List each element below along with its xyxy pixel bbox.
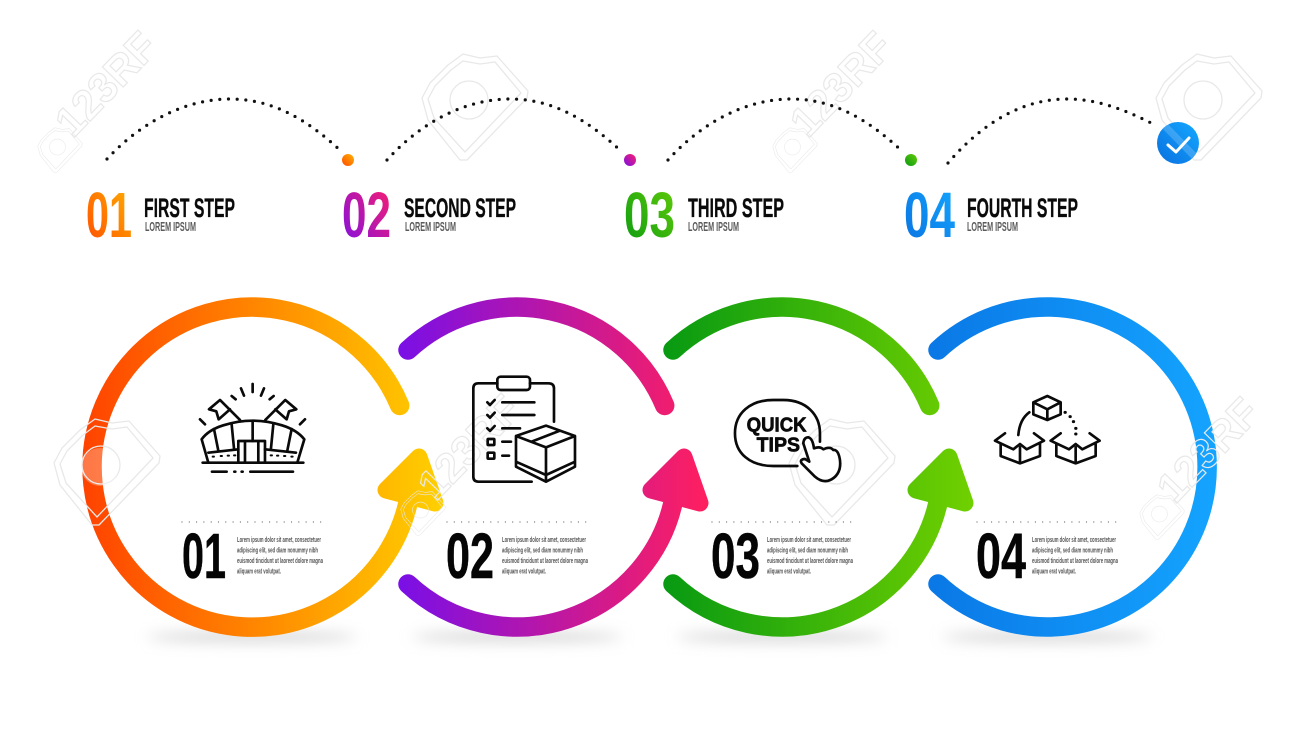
step heading 3 <box>624 179 784 251</box>
step heading 4: LOREM IPSUM <box>967 220 1018 234</box>
text block 1: adipiscing elit, sed diam nonummy nibh <box>237 548 318 554</box>
text block 4: adipiscing elit, sed diam nonummy nibh <box>1032 548 1113 554</box>
icon: quick tips bubble: QUICK <box>747 415 807 437</box>
watermark: top right <box>1156 54 1262 160</box>
panel: ring 4 blue <box>938 307 1207 627</box>
watermark: arrow 1 area: 123RF <box>409 386 529 508</box>
text block 3: aliquam erat volutpat. <box>767 568 811 576</box>
dotted connector 2 <box>387 99 622 160</box>
arrowhead 1 <box>386 457 435 503</box>
step heading 4: FOURTH STEP <box>967 193 1078 223</box>
step heading 4 <box>904 179 1078 251</box>
step heading 3: THIRD STEP <box>688 193 784 223</box>
node dot green <box>905 154 917 166</box>
text block 2: Lorem ipsum dolor sit amet, consectetuer <box>502 537 586 544</box>
text block 4: aliquam erat volutpat. <box>1032 568 1076 576</box>
text block 4: euismod tincidunt ut laoreet dolore magna <box>1032 558 1118 565</box>
step heading 1: FIRST STEP <box>144 193 235 223</box>
panel: ring 1 orange <box>92 307 435 627</box>
icon: checklist with parcel <box>473 377 575 482</box>
watermark: top second <box>422 54 528 160</box>
watermark: quick tips area <box>789 419 895 525</box>
text block 1: Lorem ipsum dolor sit amet, consectetuer <box>237 537 321 544</box>
step heading 2: 02 <box>342 179 391 251</box>
text block 3: 03 <box>711 520 760 592</box>
icon: boxes distribution <box>995 396 1100 463</box>
step heading 2: LOREM IPSUM <box>405 220 456 234</box>
icon: check badge <box>1157 122 1199 164</box>
ground shadows <box>147 633 1152 641</box>
text block 3 <box>711 520 853 592</box>
text block 1: euismod tincidunt ut laoreet dolore magna <box>237 558 323 565</box>
step heading 1 <box>86 179 235 251</box>
node dot orange <box>342 154 354 166</box>
watermark: top third: 123RF <box>781 23 901 145</box>
panel: ring 3 green <box>673 307 965 627</box>
arrowhead 3 <box>916 457 965 503</box>
step heading 2 <box>342 179 516 251</box>
watermark: top left: 123RF <box>46 23 166 145</box>
icon: quick tips bubble: TIPS <box>757 435 800 457</box>
text block 2: 02 <box>446 520 494 592</box>
text block 4: Lorem ipsum dolor sit amet, consectetuer <box>1032 537 1116 544</box>
dotted connector 3 <box>668 99 903 160</box>
step heading 1: LOREM IPSUM <box>145 220 196 234</box>
icon: stadium <box>200 384 305 472</box>
panel: ring 2 purple pink <box>408 307 700 627</box>
text block 1 <box>182 520 323 592</box>
text block 4 <box>976 520 1118 592</box>
watermark: lens on ring 1 <box>54 419 160 525</box>
step heading 2: SECOND STEP <box>404 193 516 223</box>
step heading 4: 04 <box>904 179 955 251</box>
step heading 1: 01 <box>86 179 132 251</box>
text block 2: adipiscing elit, sed diam nonummy nibh <box>502 548 583 554</box>
text block 3: euismod tincidunt ut laoreet dolore magna <box>767 558 853 565</box>
dotted connector 1 <box>107 99 342 159</box>
arrowhead 2 <box>651 457 700 503</box>
step heading 3: 03 <box>624 179 675 251</box>
dotted connector 4 <box>948 99 1157 163</box>
step heading 3: LOREM IPSUM <box>688 220 739 234</box>
watermark: ring 4: 123RF <box>1148 389 1268 511</box>
node dot purple <box>624 154 636 166</box>
text block 2 <box>446 520 588 592</box>
text block 4: 04 <box>976 520 1026 592</box>
text block 2: aliquam erat volutpat. <box>502 568 546 576</box>
text block 2: euismod tincidunt ut laoreet dolore magna <box>502 558 588 565</box>
text block 1: aliquam erat volutpat. <box>237 568 281 576</box>
text block 3: adipiscing elit, sed diam nonummy nibh <box>767 548 848 554</box>
text block 1: 01 <box>182 520 226 592</box>
icon: quick tips bubble <box>735 400 840 481</box>
text block 3: Lorem ipsum dolor sit amet, consectetuer <box>767 537 851 544</box>
